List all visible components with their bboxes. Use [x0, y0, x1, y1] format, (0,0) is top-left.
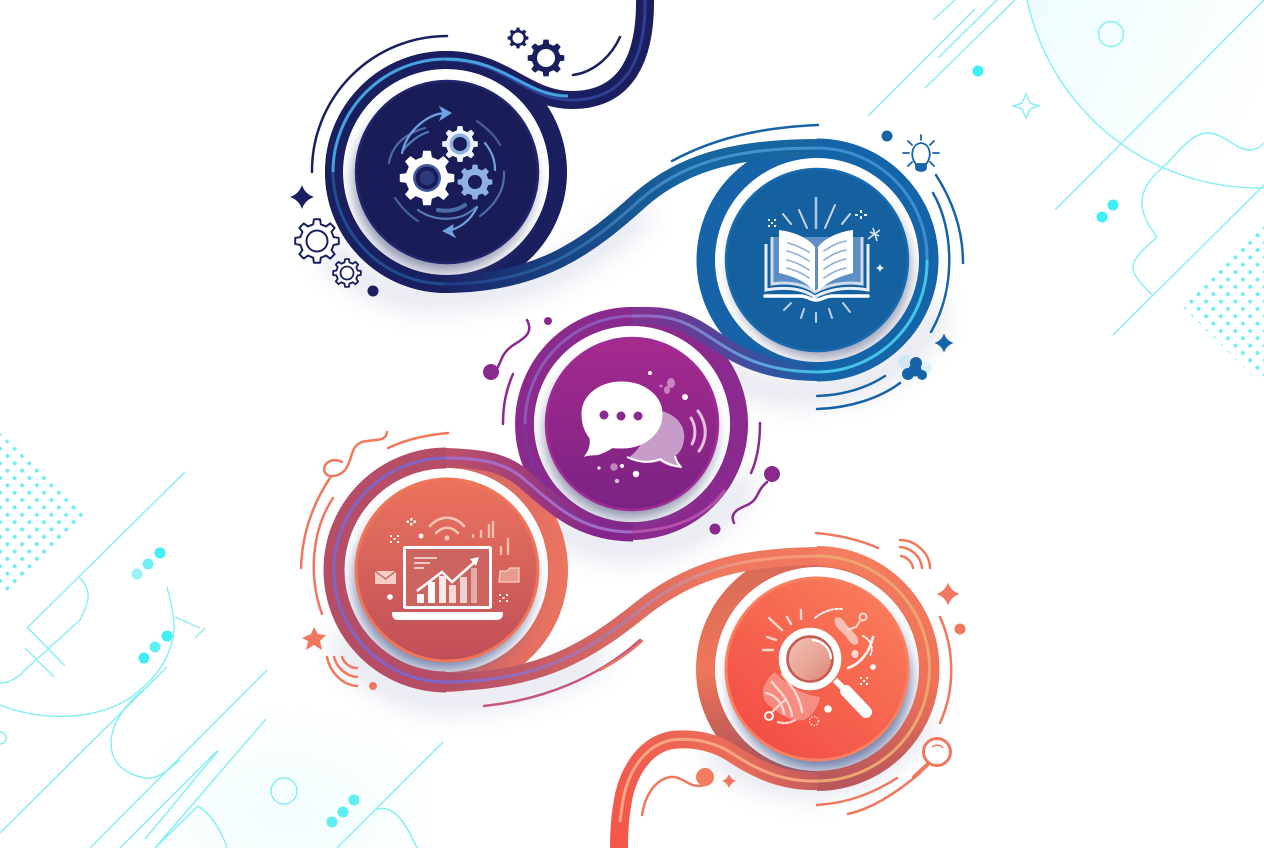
ribbon: around step 2	[817, 148, 929, 372]
icon: open book	[765, 198, 884, 322]
decorations: step 3 squiggles and dots	[483, 317, 780, 534]
decorations: step 2 bulb, star and arcs	[672, 125, 963, 409]
ribbon: around step 3	[524, 316, 632, 532]
inner white gaps	[343, 69, 919, 771]
background pattern: top right geometry	[868, 0, 1264, 380]
ribbon: step 2 to step 3	[631, 316, 818, 372]
icon: magnifying glass	[763, 609, 876, 726]
lens	[782, 632, 838, 686]
disc	[356, 479, 538, 661]
ring: step 4	[334, 458, 558, 682]
background pattern: bottom left geometry	[0, 433, 443, 848]
decorations: step 5 waves, stars and small magnifier	[600, 533, 966, 815]
step 2: blue open book disc	[672, 125, 963, 409]
disc	[356, 81, 538, 263]
ribbon: around step 5	[817, 556, 930, 781]
pale fade on ribbon around step 3	[632, 490, 725, 532]
disc shadows	[354, 92, 911, 771]
disc	[726, 578, 908, 760]
decorations: step 4 arcs, star and waves	[301, 432, 640, 706]
swirl: lower left	[763, 672, 820, 720]
step 3: purple chat disc	[483, 317, 780, 534]
ribbon: around step 4	[334, 458, 446, 682]
ring: step 5	[706, 558, 928, 780]
ribbon highlight lines	[333, 0, 930, 822]
ring: step 1	[334, 60, 558, 284]
ring: step 2	[706, 149, 928, 371]
ring: step 3	[525, 317, 739, 531]
ribbon: exit from step 5	[619, 739, 818, 848]
ribbon: step 4 to step 5	[445, 556, 818, 682]
icon: small magnifier	[914, 738, 950, 777]
decorations: step 1 gears, stars and arcs	[290, 28, 620, 296]
ribbon: step 1 to step 2	[445, 148, 818, 284]
swirl: upper right	[835, 617, 858, 645]
icon: light bulb	[903, 135, 939, 171]
disc	[726, 169, 908, 351]
step 5: coral magnifier disc	[600, 533, 966, 815]
icon: blue blob	[898, 355, 932, 380]
ribbon soft shadows	[330, 215, 935, 784]
ribbon: navy, top entry to step 1	[334, 0, 645, 284]
ribbon: step 3 to step 4	[445, 458, 633, 532]
icon: rotating gears	[389, 107, 504, 237]
icon: chat bubbles	[582, 371, 705, 483]
step 1: navy gears disc	[290, 28, 620, 296]
disc	[546, 338, 718, 510]
ribbon system: connecting path through all five steps	[333, 0, 930, 848]
step 4: coral laptop disc	[301, 432, 640, 706]
icon: laptop with growth chart	[375, 518, 519, 619]
